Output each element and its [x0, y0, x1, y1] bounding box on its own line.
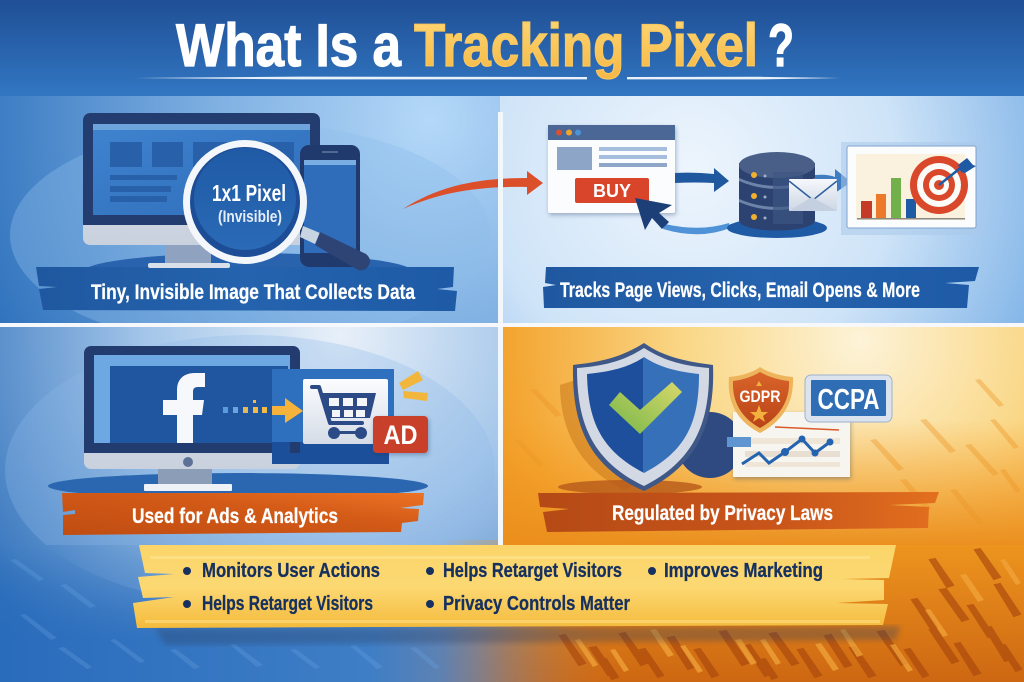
- pixel dots: [223, 400, 267, 413]
- banner: tracks page views: [543, 267, 979, 308]
- banner: tiny invisible image: [36, 267, 457, 311]
- arrow: window to database: [675, 168, 729, 192]
- banner: tracks page views: Tracks Page Views, Clicks, Email Opens & More: [560, 279, 920, 302]
- icon: line chart card: [727, 412, 850, 477]
- bottom background: orange blend with brush strokes: [0, 540, 1024, 682]
- icon: shield with check: [558, 343, 713, 494]
- badge: ccpa: [805, 375, 892, 422]
- icon: monitor with facebook page: [48, 346, 428, 499]
- arrow: red curved arrow into window: [403, 171, 543, 209]
- panel: tiny invisible image: [0, 96, 504, 347]
- texture: faint paint strokes: [515, 379, 1021, 525]
- icon: cursor: [635, 198, 672, 230]
- badge: gdpr: [729, 367, 793, 433]
- panel: tracks page views: [403, 96, 1024, 325]
- banner: regulated by privacy laws: Regulated by Privacy Laws: [612, 502, 833, 525]
- icon: facebook f: [163, 373, 205, 443]
- badge: ad: [373, 416, 428, 453]
- title: Tracking Pixel: [414, 12, 758, 79]
- icon: magnifying glass: [183, 140, 370, 270]
- list item: privacy controls matter: Privacy Controls Matter: [443, 593, 630, 615]
- badge: ccpa: CCPA: [818, 384, 880, 416]
- arrow: database to chart: [815, 169, 851, 193]
- icon: shopping cart: [303, 379, 388, 444]
- banner: tiny invisible image: Tiny, Invisible Image That Collects Data: [91, 281, 415, 304]
- title: What Is a: [176, 12, 402, 79]
- header band: [0, 0, 1024, 96]
- arrow: database back to window: [663, 223, 730, 234]
- list item: monitors user actions: Monitors User Actions: [202, 560, 380, 582]
- banner: regulated by privacy laws: [538, 492, 939, 532]
- panel: summary plank: [133, 545, 900, 645]
- icon: chart with target: [841, 142, 982, 235]
- icon: desktop monitor: [83, 113, 320, 268]
- badge: gdpr: GDPR: [740, 387, 780, 406]
- desk shadow: [83, 253, 413, 291]
- icon: smartphone: [300, 145, 360, 267]
- dividers: [0, 112, 1024, 545]
- icon: envelope: [789, 179, 837, 211]
- banner: used for ads: Used for Ads & Analytics: [132, 505, 338, 528]
- title: ?: [768, 12, 794, 79]
- icon: database: [727, 152, 827, 238]
- text: 1x1 pixel: (Invisible): [218, 207, 282, 226]
- text: 1x1 pixel: [212, 180, 286, 226]
- panel: used for ads: [0, 327, 504, 605]
- panel: advert card: [272, 369, 394, 464]
- list item: helps retarget visitors: Helps Retarget Visitors: [443, 560, 622, 582]
- icon: dark dial behind shield: [677, 412, 743, 478]
- icon: browser window: [548, 125, 675, 213]
- arrow: yellow to cart: [272, 398, 303, 423]
- panel: regulated by privacy laws: [500, 327, 1024, 545]
- text: 1x1 pixel: 1x1 Pixel: [212, 180, 286, 206]
- title: [176, 12, 794, 79]
- button: buy: BUY: [593, 181, 631, 201]
- banner: used for ads: [62, 493, 424, 535]
- list item: improves marketing: Improves Marketing: [664, 560, 823, 582]
- list item: helps retarget visitors: Helps Retarget Visitors: [202, 593, 373, 615]
- badge: ad: AD: [384, 420, 418, 450]
- icon: yellow spark marks: [399, 371, 428, 401]
